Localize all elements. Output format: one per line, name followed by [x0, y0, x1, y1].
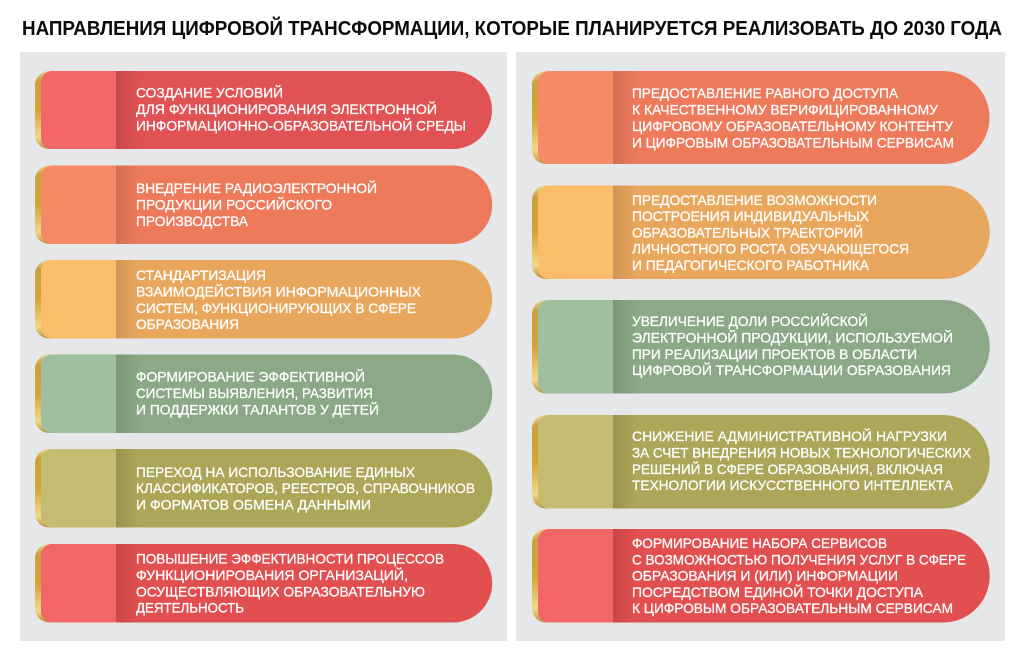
item: individual learning paths: ЛИЧНОСТНОГО РОСТА ОБУЧАЮЩЕГОСЯ — [632, 240, 909, 256]
item: electronic educational environment: ДЛЯ ФУНКЦИОНИРОВАНИЯ ЭЛЕКТРОННОЙ — [136, 100, 437, 117]
item: electronic educational environment: ИНФОРМАЦИОННО-ОБРАЗОВАТЕЛЬНОЙ СРЕДЫ — [136, 116, 466, 134]
item: equal access to digital content — [532, 71, 990, 164]
panel: right column — [516, 52, 1005, 641]
item: information systems standardization: СИСТЕМ, ФУНКЦИОНИРУЮЩИХ В СФЕРЕ — [136, 300, 416, 316]
item: equal access to digital content: ПРЕДОСТАВЛЕНИЕ РАВНОГО ДОСТУПА — [632, 85, 899, 101]
item: electronic educational environment: СОЗДАНИЕ УСЛОВИЙ — [136, 84, 283, 100]
item: organization process efficiency: ДЕЯТЕЛЬНОСТЬ — [136, 600, 244, 616]
item: unified classifiers and registries: И ФОРМАТОВ ОБМЕНА ДАННЫМИ — [136, 496, 371, 512]
item: reducing administrative burden — [532, 415, 990, 508]
item: talent support system: СИСТЕМЫ ВЫЯВЛЕНИЯ, РАЗВИТИЯ — [136, 385, 373, 401]
item: equal access to digital content: К КАЧЕСТВЕННОМУ ВЕРИФИЦИРОВАННОМУ — [632, 102, 938, 118]
item: reducing administrative burden: СНИЖЕНИЕ АДМИНИСТРАТИВНОЙ НАГРУЗКИ — [632, 427, 947, 444]
item: information systems standardization: ВЗАИМОДЕЙСТВИЯ ИНФОРМАЦИОННЫХ — [136, 282, 422, 300]
item: unified classifiers and registries: ПЕРЕХОД НА ИСПОЛЬЗОВАНИЕ ЕДИНЫХ — [136, 464, 416, 480]
item: talent support system: И ПОДДЕРЖКИ ТАЛАНТОВ У ДЕТЕЙ — [136, 400, 379, 418]
item: reducing administrative burden: ЗА СЧЕТ ВНЕДРЕНИЯ НОВЫХ ТЕХНОЛОГИЧЕСКИХ — [632, 444, 972, 460]
item: individual learning paths: ОБРАЗОВАТЕЛЬНЫХ ТРАЕКТОРИЙ — [632, 224, 863, 240]
item: organization process efficiency: ПОВЫШЕНИЕ ЭФФЕКТИВНОСТИ ПРОЦЕССОВ — [136, 550, 444, 566]
item: individual learning paths: ПРЕДОСТАВЛЕНИЕ ВОЗМОЖНОСТИ — [632, 192, 877, 208]
item: russian radio-electronic products: ПРОИЗВОДСТВА — [136, 213, 249, 229]
item: information systems standardization — [35, 260, 492, 338]
item: talent support system: ФОРМИРОВАНИЕ ЭФФЕКТИВНОЙ — [136, 368, 365, 384]
item: talent support system — [35, 354, 492, 433]
item: single access point services — [532, 529, 990, 622]
item: unified classifiers and registries — [35, 449, 492, 528]
item: single access point services: ПОСРЕДСТВОМ ЕДИНОЙ ТОЧКИ ДОСТУПА — [632, 583, 924, 600]
item: russian radio-electronic products: ВНЕДРЕНИЕ РАДИОЭЛЕКТРОННОЙ — [136, 179, 377, 196]
item: individual learning paths: И ПЕДАГОГИЧЕСКОГО РАБОТНИКА — [632, 257, 870, 273]
item: russian radio-electronic products: ПРОДУКЦИИ РОССИЙСКОГО — [136, 196, 332, 212]
item: reducing administrative burden: РЕШЕНИЙ В СФЕРЕ ОБРАЗОВАНИЯ, ВКЛЮЧАЯ — [632, 460, 943, 477]
item: individual learning paths — [532, 186, 990, 279]
item: organization process efficiency — [35, 544, 492, 622]
item: reducing administrative burden: ТЕХНОЛОГИИ ИСКУССТВЕННОГО ИНТЕЛЛЕКТА — [632, 477, 954, 493]
item: single access point services: ФОРМИРОВАНИЕ НАБОРА СЕРВИСОВ — [632, 535, 887, 551]
item: share of russian electronics: ПРИ РЕАЛИЗАЦИИ ПРОЕКТОВ В ОБЛАСТИ — [632, 346, 917, 362]
item: share of russian electronics: ЭЛЕКТРОННОЙ ПРОДУКЦИИ, ИСПОЛЬЗУЕМОЙ — [632, 328, 953, 346]
item: share of russian electronics: УВЕЛИЧЕНИЕ ДОЛИ РОССИЙСКОЙ — [632, 312, 868, 329]
item: equal access to digital content: ЦИФРОВОМУ ОБРАЗОВАТЕЛЬНОМУ КОНТЕНТУ — [632, 118, 953, 134]
item: information systems standardization: ОБРАЗОВАНИЯ — [136, 316, 239, 332]
item: single access point services: ОБРАЗОВАНИЯ И (ИЛИ) ИНФОРМАЦИИ — [632, 568, 898, 584]
item: single access point services: С ВОЗМОЖНОСТЬЮ ПОЛУЧЕНИЯ УСЛУГ В СФЕРЕ — [632, 552, 966, 568]
item: organization process efficiency: ОСУЩЕСТВЛЯЮЩИХ ОБРАЗОВАТЕЛЬНУЮ — [136, 584, 425, 600]
item: information systems standardization: СТАНДАРТИЗАЦИЯ — [136, 267, 266, 283]
item: equal access to digital content: И ЦИФРОВЫМ ОБРАЗОВАТЕЛЬНЫМ СЕРВИСАМ — [632, 134, 954, 150]
item: electronic educational environment — [35, 71, 492, 149]
item: single access point services: К ЦИФРОВЫМ ОБРАЗОВАТЕЛЬНЫМ СЕРВИСАМ — [632, 600, 953, 616]
panel: left column — [20, 52, 507, 641]
item: share of russian electronics: ЦИФРОВОЙ ТРАНСФОРМАЦИИ ОБРАЗОВАНИЯ — [632, 361, 951, 378]
item: individual learning paths: ПОСТРОЕНИЯ ИНДИВИДУАЛЬНЫХ — [632, 208, 870, 224]
item: organization process efficiency: ФУНКЦИОНИРОВАНИЯ ОРГАНИЗАЦИЙ, — [136, 566, 408, 583]
item: unified classifiers and registries: КЛАССИФИКАТОРОВ, РЕЕСТРОВ, СПРАВОЧНИКОВ — [136, 480, 475, 496]
item: russian radio-electronic products — [35, 166, 492, 244]
item: share of russian electronics — [532, 300, 990, 394]
